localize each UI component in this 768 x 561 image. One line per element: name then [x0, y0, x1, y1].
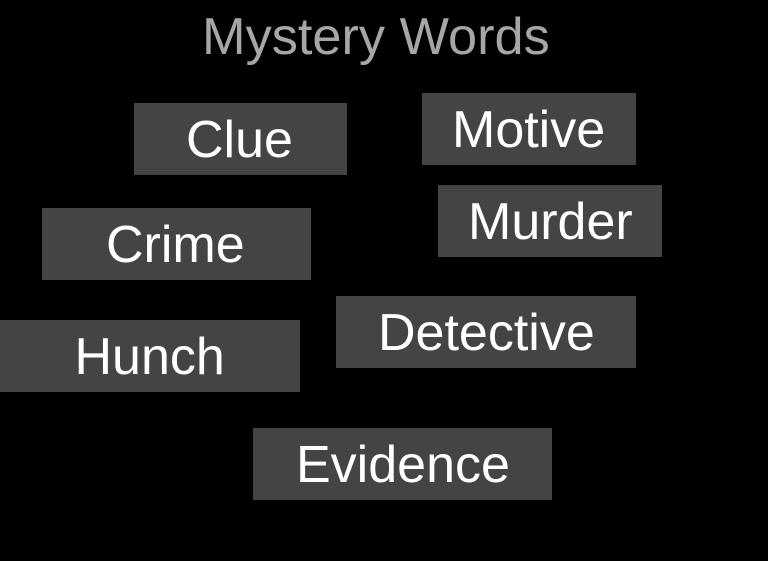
word box: Evidence: [252, 428, 552, 500]
word box: Murder: [438, 184, 662, 256]
word box: Evidence: Evidence: [296, 436, 510, 494]
word box: Hunch: [0, 320, 300, 392]
word box: Hunch: Hunch: [74, 328, 225, 386]
word box: Detective: [336, 296, 636, 368]
word box: Clue: Clue: [186, 111, 293, 169]
word box: Crime: [42, 208, 311, 280]
word box: Clue: [134, 103, 347, 175]
word box: Detective: Detective: [378, 304, 595, 362]
word box: Motive: [422, 93, 636, 165]
word box: Murder: Murder: [468, 192, 633, 250]
word box: Crime: Crime: [106, 216, 245, 274]
title: Mystery Words: [202, 8, 550, 66]
word box: Motive: Motive: [452, 101, 605, 159]
